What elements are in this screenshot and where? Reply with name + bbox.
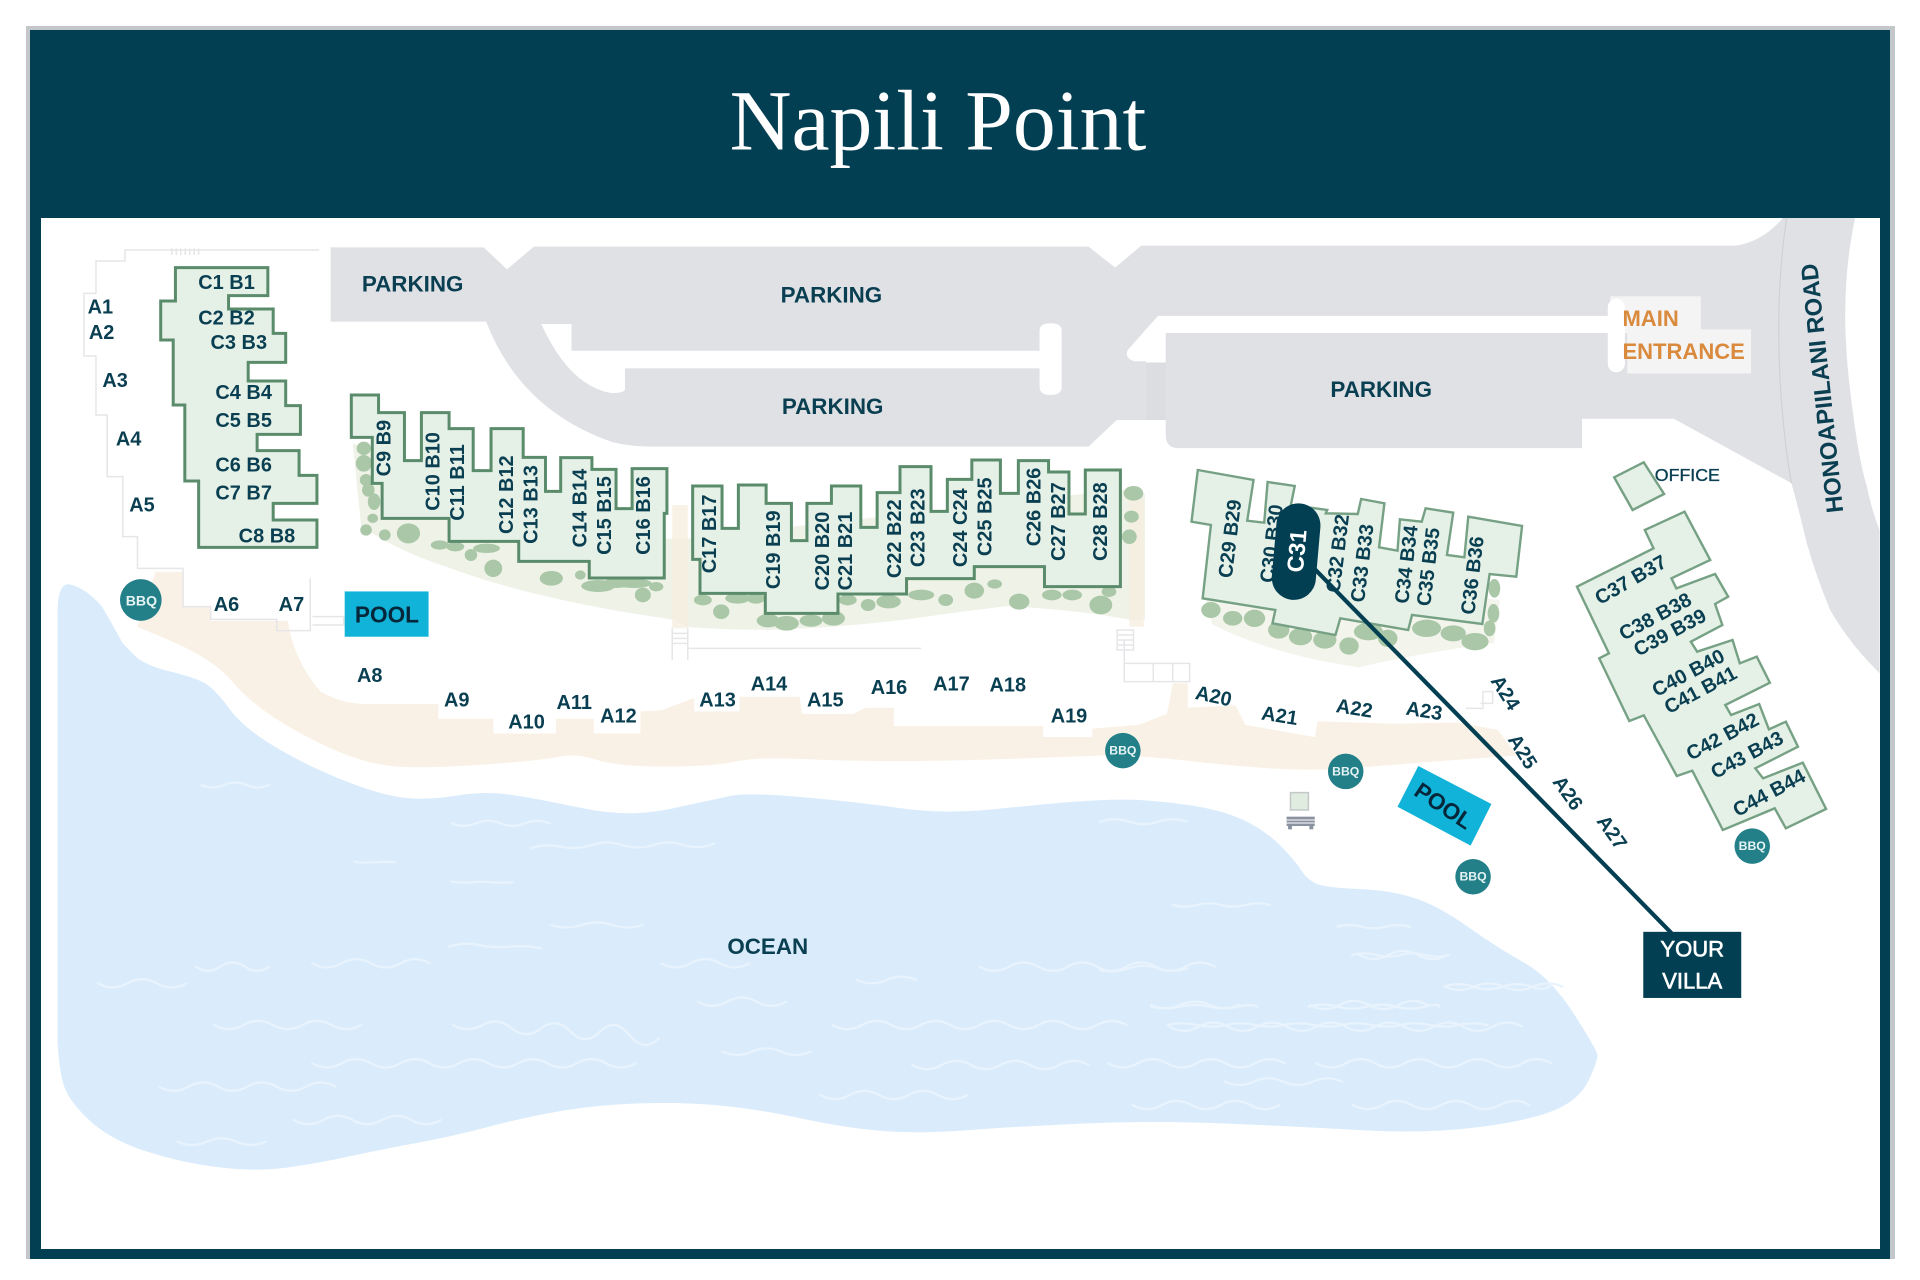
unit labels C17 to C28: C17 B17	[699, 495, 721, 573]
pool east	[1398, 766, 1491, 846]
A unit labels: A8	[357, 665, 383, 687]
A unit labels: A17	[933, 673, 970, 695]
trees west	[356, 442, 663, 602]
A unit labels: A10	[508, 711, 545, 733]
BBQ marker west: BBQ	[126, 593, 157, 609]
unit labels C37 to C44: C44 B44	[1729, 765, 1809, 822]
unit labels C9 to C16: C9 B9	[373, 420, 395, 476]
unit labels C29 to C36: C30 B30	[1257, 503, 1288, 584]
A unit labels: A27	[1592, 811, 1631, 854]
unit labels C17 to C28: C22 B22	[884, 499, 906, 578]
parking labels: PARKING	[362, 272, 463, 297]
unit labels C9 to C16	[373, 420, 655, 555]
white strip between lots	[541, 323, 1062, 395]
trees central	[694, 486, 1143, 631]
A unit labels: A4	[116, 429, 141, 451]
unit labels C37 to C44: C43 B43	[1707, 727, 1787, 784]
unit labels C29 to C36: C29 B29	[1215, 498, 1246, 579]
main entrance label: MAIN	[1622, 306, 1679, 331]
unit labels C17 to C28: C24 C24	[950, 488, 972, 567]
ocean and beach, display-scale group	[58, 443, 1597, 1170]
unit labels C1 to C8: C2 B2	[198, 307, 255, 329]
A unit labels: A19	[1051, 705, 1087, 727]
pool east: POOL	[1410, 777, 1478, 835]
unit labels C9 to C16: C14 B14	[569, 469, 591, 548]
unit labels C29 to C36: C35 B35	[1413, 527, 1445, 607]
your villa callout	[1643, 932, 1741, 998]
A unit labels: A22	[1335, 695, 1374, 723]
A unit labels: A9	[444, 689, 469, 711]
parking lots and Honoapiilani road surface	[331, 218, 1880, 673]
unit labels C1 to C8: C3 B3	[211, 332, 267, 354]
BBQ marker east: BBQ	[1739, 839, 1766, 853]
unit labels C17 to C28: C20 B20	[812, 512, 834, 590]
upper ocean waves	[202, 782, 714, 948]
unit labels C29 to C36: C36 B36	[1457, 535, 1489, 616]
A unit labels: A13	[699, 689, 736, 711]
A unit labels: A21	[1260, 703, 1299, 730]
unit labels C37 to C44: C41 B41	[1661, 662, 1741, 719]
faint property outlines	[84, 248, 344, 631]
east ocean waves	[1100, 819, 1551, 1027]
unit labels C29 to C36: C33 B33	[1347, 523, 1379, 604]
A unit labels: A3	[102, 370, 128, 392]
A unit labels: A12	[600, 705, 637, 727]
walkways	[672, 500, 1144, 660]
A unit labels: A6	[214, 594, 239, 616]
unit labels C9 to C16: C13 B13	[520, 465, 542, 544]
A unit labels: A5	[129, 495, 155, 517]
unit labels C37 to C44: C42 B42	[1683, 709, 1763, 765]
building C37 to C44	[1577, 512, 1826, 830]
building C9 to C16	[351, 395, 667, 578]
road label: HONOAPIILANI ROAD	[1796, 262, 1849, 514]
unit labels C17 to C28: C27 B27	[1048, 482, 1070, 561]
unit labels C9 to C16: C12 B12	[496, 455, 518, 534]
unit labels C17 to C28: C28 B28	[1090, 482, 1112, 561]
BBQ marker by pool	[1455, 859, 1491, 894]
parking labels	[362, 272, 1432, 419]
parking and road	[331, 218, 1880, 673]
trees east	[1201, 579, 1500, 655]
unit labels C9 to C16: C11 B11	[447, 444, 469, 521]
main entrance patch	[1608, 296, 1751, 373]
A unit labels: A26	[1548, 772, 1587, 815]
unit labels C1 to C8	[198, 272, 295, 547]
A unit labels: A1	[88, 296, 113, 318]
beach sand	[137, 572, 1517, 770]
A unit labels: A2	[89, 322, 114, 344]
connector line	[1146, 362, 1166, 420]
BBQ marker central	[1105, 733, 1141, 768]
A unit labels: A18	[989, 675, 1026, 697]
unit labels C17 to C28: C25 B25	[975, 477, 997, 556]
parking labels: PARKING	[782, 394, 883, 419]
unit labels C37 to C44: C40 B40	[1649, 645, 1728, 702]
parking labels: PARKING	[1330, 377, 1432, 402]
office building	[1614, 462, 1664, 510]
shore walkway details	[1124, 640, 1493, 708]
unit labels C37 to C44: C37 B37	[1591, 551, 1671, 610]
bench and small lawn	[1287, 793, 1315, 829]
A unit labels: A16	[871, 677, 907, 699]
lawn behind buildings	[353, 443, 1145, 630]
road edge line	[1779, 218, 1791, 483]
BBQ marker beach	[1328, 754, 1363, 789]
your villa callout: VILLA	[1662, 968, 1723, 993]
title: Napili Point	[730, 74, 1146, 169]
main entrance label	[1622, 306, 1745, 364]
unit labels C17 to C28: C21 B21	[835, 512, 857, 590]
A unit labels: A7	[279, 594, 304, 616]
unit labels C37 to C44: C38 B38	[1616, 589, 1695, 645]
unit labels C1 to C8: C7 B7	[215, 482, 272, 504]
unit labels C17 to C28	[699, 468, 1112, 590]
unit labels C9 to C16: C15 B15	[594, 476, 616, 555]
unit labels C17 to C28: C23 B23	[907, 488, 929, 567]
unit labels C37 to C44: C39 B39	[1630, 605, 1710, 661]
unit labels C1 to C8: C6 B6	[215, 454, 272, 476]
text and markers, display-scale group	[88, 74, 1849, 998]
BBQ marker beach: BBQ	[1332, 764, 1359, 778]
your villa callout: YOUR	[1660, 936, 1724, 961]
C31 highlighted villa	[1270, 502, 1322, 602]
ocean	[58, 584, 1597, 1170]
unit labels C1 to C8: C1 B1	[198, 272, 255, 294]
BBQ marker west	[120, 579, 162, 621]
unit labels C29 to C36	[1215, 498, 1489, 616]
unit labels C29 to C36: C34 B34	[1391, 524, 1423, 605]
parking labels: PARKING	[781, 283, 882, 308]
lawn C29 to C36	[1202, 569, 1500, 667]
pool west	[345, 591, 429, 637]
office label: OFFICE	[1655, 465, 1720, 485]
A unit labels: A11	[557, 692, 592, 714]
building C17 to C28	[693, 460, 1120, 613]
A unit labels: A24	[1486, 672, 1524, 714]
unit labels C1 to C8: C8 B8	[239, 525, 295, 547]
unit labels C1 to C8: C5 B5	[215, 410, 272, 432]
A unit labels: A14	[751, 673, 787, 695]
ocean waves	[98, 951, 1562, 1145]
A unit labels	[88, 296, 1631, 854]
unit labels C1 to C8: C4 B4	[215, 382, 272, 404]
main entrance label: ENTRANCE	[1622, 339, 1745, 364]
pool west: POOL	[355, 602, 419, 628]
A unit labels: A25	[1503, 730, 1541, 773]
your villa pointer line	[1311, 566, 1671, 933]
unit labels C9 to C16: C16 B16	[633, 476, 655, 555]
white island left of east lot	[1127, 316, 1616, 362]
building C1 to C8	[161, 268, 317, 547]
unit labels C17 to C28: C19 B19	[763, 510, 785, 589]
unit labels C37 to C44	[1591, 551, 1809, 822]
A unit labels: A23	[1404, 698, 1444, 725]
A unit labels: A15	[807, 689, 844, 711]
building C29 to C36	[1192, 470, 1522, 635]
unit labels C17 to C28: C26 B26	[1024, 468, 1046, 546]
unit labels C29 to C36: C32 B32	[1323, 513, 1354, 594]
A unit labels: A20	[1193, 682, 1234, 711]
unit labels C9 to C16: C10 B10	[422, 432, 444, 511]
BBQ marker central: BBQ	[1109, 744, 1136, 758]
ocean label: OCEAN	[727, 934, 808, 959]
C31 highlighted villa: C31	[1282, 529, 1312, 573]
BBQ marker east	[1734, 828, 1770, 864]
BBQ marker by pool: BBQ	[1459, 870, 1487, 884]
